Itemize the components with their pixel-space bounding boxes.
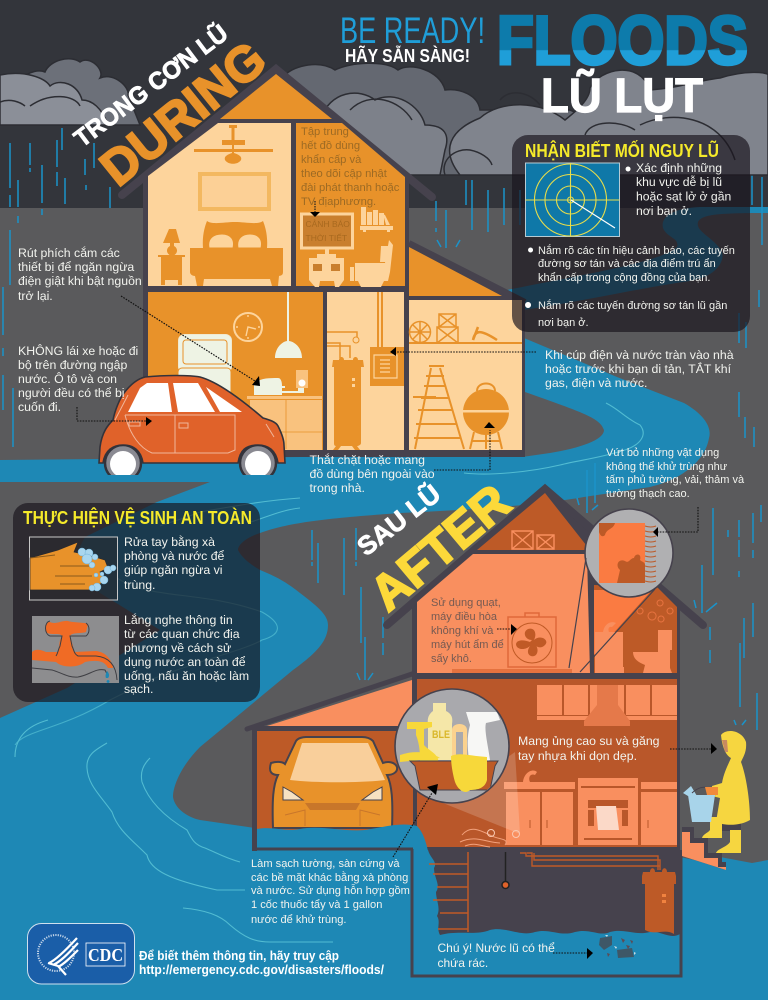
living room bbox=[296, 123, 405, 287]
text: clean surfaces: và nước. Sử dụng hỗn hợp gồm bbox=[251, 884, 410, 897]
text: emergency radio: khẩn cấp và bbox=[301, 154, 362, 166]
trash bbox=[599, 935, 636, 958]
text: debris warning: chứa rác. bbox=[438, 956, 488, 970]
garage floor water bbox=[257, 825, 428, 851]
arrow: radio to tv bbox=[310, 201, 320, 217]
footer text: http://emergency.cdc.gov/disasters/floods/ bbox=[139, 963, 384, 977]
text: secure outdoor items: Thắt chặt hoặc mang bbox=[310, 452, 425, 467]
stairs bbox=[682, 827, 726, 870]
basement bbox=[412, 849, 681, 976]
text: turn off utilities: Khi cúp điện và nước tràn vào nhà bbox=[545, 348, 734, 362]
text: turn off utilities: gas, điện và nước. bbox=[545, 376, 647, 390]
footer bbox=[28, 924, 384, 984]
risk text 3: Nắm rõ các tuyến đường sơ tán lũ gần bbox=[538, 299, 727, 312]
stove bbox=[578, 778, 638, 845]
water heater and pipes bbox=[332, 357, 364, 450]
title block bbox=[340, 2, 748, 123]
hygiene text 1: trùng. bbox=[124, 578, 155, 592]
text: do not drive: cuốn đi. bbox=[18, 400, 61, 414]
text: tv warning: THỜI TIẾT bbox=[306, 233, 347, 243]
house: after bbox=[247, 489, 750, 976]
risk text 2: Nắm rõ các tín hiệu cảnh báo, các tuyến bbox=[538, 244, 735, 257]
cloud: left back bbox=[20, 59, 140, 125]
water ripples bbox=[15, 403, 643, 942]
hygiene text 2: Lắng nghe thông tin bbox=[124, 612, 233, 627]
arrow: debris bbox=[553, 948, 593, 959]
cloud: right back bbox=[285, 63, 600, 175]
text: clean surfaces: nước để khử trùng. bbox=[251, 914, 347, 926]
arrow: wall bbox=[653, 507, 698, 537]
arrow: person bbox=[670, 743, 717, 754]
text: throw away items: Vứt bỏ những vật dụng bbox=[606, 447, 719, 459]
windows bbox=[128, 383, 242, 412]
house walls and roof bbox=[122, 69, 525, 457]
hay san sang: HÃY SẴN SÀNG! bbox=[345, 45, 470, 66]
wheels bbox=[104, 446, 278, 475]
risk text 2: đường sơ tán và các địa điểm trú ẩn bbox=[538, 258, 716, 270]
car: red-orange bbox=[99, 376, 285, 481]
shelf strip bbox=[452, 669, 572, 673]
risk text 1: Xác định những bbox=[636, 161, 722, 175]
basement outline bbox=[412, 849, 681, 976]
arrow: grill bbox=[434, 422, 495, 470]
bedroom bbox=[148, 123, 291, 286]
river bbox=[0, 207, 768, 1000]
text: do not drive: người đều có thể bị bbox=[18, 386, 125, 400]
arrow: fan bbox=[497, 624, 517, 635]
arrow: panel bbox=[390, 347, 536, 356]
during: DURING bbox=[90, 30, 276, 197]
panel heading: THỰC HIỆN VỆ SINH AN TOÀN bbox=[23, 507, 252, 528]
text: throw away items: tấm phủ tường, vải, thảm và bbox=[606, 474, 745, 486]
hygiene text 1: Rửa tay bằng xà bbox=[124, 534, 215, 549]
counter and cabinets bbox=[247, 396, 322, 450]
risk text 2: khẩn cấp trong cộng đồng của bạn. bbox=[538, 272, 710, 284]
ceiling fan bbox=[194, 125, 273, 164]
upper cabinets and hood bbox=[537, 685, 677, 720]
supplies magnifier bbox=[395, 689, 509, 803]
kitchen bbox=[148, 292, 323, 450]
text: unplug: Rút phích cắm các bbox=[18, 245, 120, 260]
clock bbox=[234, 313, 262, 341]
lower roof room bbox=[409, 247, 502, 296]
hygiene text 2: uống, nấu ăn hoặc làm bbox=[124, 669, 249, 683]
hygiene text 2: sạch. bbox=[124, 682, 153, 696]
cloud: far right bbox=[450, 70, 768, 175]
tv stand, console, shelf, sofa bbox=[309, 207, 393, 287]
text: use fans: không khí và bbox=[431, 625, 494, 637]
risk text 1: nơi bạn ở. bbox=[636, 204, 692, 218]
fan bbox=[508, 613, 556, 667]
main floor bbox=[417, 679, 677, 847]
garage bbox=[252, 680, 428, 851]
beam of light and mop swirl bbox=[443, 752, 520, 834]
icon: radar bbox=[526, 163, 620, 236]
hygiene text 2: phương về cách sử bbox=[124, 641, 231, 655]
text: use fans: Sử dụng quạt, bbox=[431, 597, 501, 609]
text: emergency radio: TV địaphương. bbox=[301, 196, 376, 208]
text: use fans: máy hút ẩm để bbox=[431, 639, 504, 651]
text: clean surfaces: Làm sạch tường, sàn cứng và bbox=[251, 858, 400, 870]
wall magnifier bbox=[569, 509, 673, 672]
grill bbox=[463, 384, 509, 449]
tv bbox=[302, 214, 352, 248]
arrow: car bbox=[77, 407, 152, 426]
walls and roof bbox=[247, 489, 703, 850]
text: use fans: máy điều hòa bbox=[431, 611, 498, 623]
toaster and outlet bbox=[254, 378, 304, 395]
be ready: BE READY! bbox=[340, 10, 485, 51]
bucket bbox=[683, 786, 715, 822]
hammer bbox=[473, 327, 497, 340]
text: tv warning: CẢNH BÁO bbox=[306, 218, 350, 229]
attic bbox=[477, 493, 590, 550]
hygiene text 1: giúp ngăn ngừa vi bbox=[124, 563, 222, 577]
right cabinet bbox=[641, 782, 677, 845]
arrow: unplug to toaster bbox=[121, 296, 260, 386]
text: unplug: điện giật khi bật nguồn bbox=[18, 274, 142, 288]
text: wear boots: Mang ủng cao su và găng bbox=[518, 734, 660, 748]
after: AFTER bbox=[360, 475, 521, 621]
attic bbox=[220, 74, 332, 119]
text: secure outdoor items: trong nhà. bbox=[310, 481, 365, 495]
cdc wordmark: CDC bbox=[88, 945, 123, 965]
front car bbox=[270, 737, 397, 828]
text: use fans: sấy khô. bbox=[431, 653, 472, 665]
text: clean surfaces: các bề mặt khác bằng xà phòng bbox=[251, 871, 408, 884]
shelf bbox=[409, 342, 522, 344]
section heading: during bbox=[69, 19, 276, 197]
wheel bbox=[410, 322, 430, 342]
icon: washing hands bbox=[30, 537, 118, 600]
icon: faucet bbox=[32, 616, 119, 683]
arrows bbox=[77, 201, 717, 959]
hygiene text 1: phòng và nước để bbox=[124, 549, 225, 563]
text: emergency radio: hết đồ dùng bbox=[301, 140, 360, 152]
risk text 1: khu vực dễ bị lũ bbox=[636, 174, 722, 189]
lamp and nightstand bbox=[158, 229, 185, 285]
panel: safe hygiene bbox=[13, 503, 260, 702]
sau lu: SAU LŨ bbox=[351, 478, 446, 562]
text: emergency radio: theo dõi cập nhật bbox=[301, 168, 388, 180]
text: do not drive: nước. Ô tô và con bbox=[18, 371, 117, 386]
person in raincoat bbox=[683, 731, 750, 853]
bullets bbox=[525, 166, 631, 308]
text: unplug: trở lại. bbox=[18, 289, 53, 303]
text: throw away items: tường thạch cao. bbox=[606, 488, 690, 500]
text: wear boots: tay nhựa khi dọn dẹp. bbox=[518, 749, 637, 763]
utility room bbox=[327, 292, 404, 450]
fridge bbox=[178, 334, 232, 412]
footer text: Để biết thêm thông tin, hãy truy cập bbox=[139, 949, 339, 963]
picture frame bbox=[198, 172, 271, 211]
text: secure outdoor items: đồ dùng bên ngoài vào bbox=[310, 467, 435, 481]
body bbox=[99, 376, 285, 463]
hygiene text 2: từ các quan chức địa bbox=[124, 627, 240, 641]
arrow: clean supplies bbox=[393, 784, 438, 857]
ladder bbox=[413, 366, 464, 449]
cloud: right front bbox=[320, 93, 447, 175]
cdc logo bbox=[28, 924, 134, 984]
water heater bbox=[642, 868, 676, 934]
cloud: left front bbox=[0, 73, 108, 125]
hygiene text 2: dụng nước an toàn để bbox=[124, 655, 246, 669]
upper room bbox=[417, 554, 590, 673]
storage room bbox=[409, 300, 522, 450]
risk text 1: hoặc sạt lở ở gần bbox=[636, 190, 731, 204]
bleach label: BLE bbox=[432, 729, 450, 741]
risk text 3: nơi bạn ở. bbox=[538, 317, 589, 329]
text: unplug: thiết bị để ngăn ngừa bbox=[18, 260, 134, 274]
lu lut: LŨ LỤT bbox=[541, 68, 703, 123]
electric panel bbox=[370, 292, 404, 386]
house: during bbox=[122, 69, 525, 457]
text: emergency radio: đài phát thanh hoặc bbox=[301, 182, 400, 194]
rain bbox=[3, 128, 762, 730]
text: do not drive: bộ trên đường ngập bbox=[18, 358, 127, 372]
bathroom bbox=[594, 585, 677, 673]
pendant lamp bbox=[275, 292, 302, 358]
trong con lu: TRONG CƠN LŨ bbox=[69, 19, 233, 153]
boxes bbox=[437, 314, 458, 343]
panel: flood risk bbox=[512, 135, 750, 332]
bed bbox=[203, 221, 267, 248]
clouds bbox=[0, 59, 768, 175]
section heading: after bbox=[351, 475, 521, 621]
text: emergency radio: Tập trung bbox=[301, 126, 349, 138]
sink counter bbox=[504, 770, 575, 845]
panel heading: NHẬN BIẾT MỐI NGUY LŨ bbox=[525, 140, 719, 161]
text: debris warning: Chú ý! Nước lũ có thể bbox=[438, 941, 555, 955]
text: clean surfaces: 1 cốc thuốc tẩy và 1 gallon bbox=[251, 899, 382, 911]
text: do not drive: KHÔNG lái xe hoặc đi bbox=[18, 343, 138, 358]
text: throw away items: không thể khử trùng như bbox=[606, 461, 728, 473]
hhs seal bbox=[38, 935, 78, 975]
text: turn off utilities: hoặc trước khi bạn di tản, TẮT khí bbox=[545, 361, 732, 376]
